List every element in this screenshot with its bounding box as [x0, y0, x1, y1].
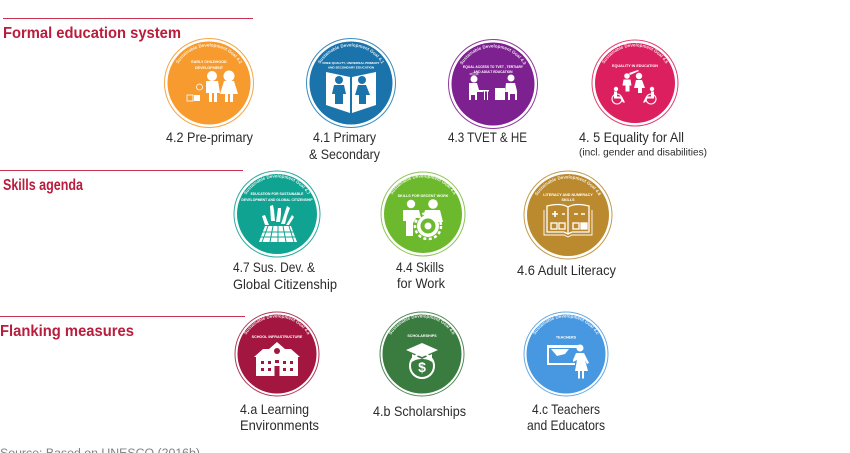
label: 4.7 Sus. Dev. & Global Citizenship: 4.7 Sus. Dev. & — [233, 259, 316, 275]
label: 4.c Teachers and Educators: 4.c Teachers — [532, 401, 600, 417]
badge: 4.5 equality in education — [592, 40, 678, 126]
heading: Formal education system: Formal education system — [3, 25, 181, 42]
badge: 4.b scholarships: SCHOLARSHIPS — [407, 334, 437, 338]
badge: 4.2 early childhood development: Sustainable Development Goal 4.2 — [176, 43, 242, 64]
label: 4.4 Skills for Work — [396, 259, 446, 291]
icon: open book with children — [326, 72, 376, 113]
badge: 4.2 early childhood development — [164, 38, 254, 128]
badge: 4.c teachers: Sustainable Development Goal 4.c — [533, 314, 598, 334]
label: 4.b Scholarships: 4.b Scholarships — [373, 403, 466, 419]
label: 4.4 Skills for Work: 4.4 Skills — [396, 259, 444, 275]
badge: 4.6 literacy and numeracy skills: SKILLS — [561, 198, 575, 202]
heading: Skills agenda: Skills agenda — [3, 177, 83, 194]
label: 4.5 Equality for All — [579, 129, 707, 158]
label: 4.3 TVET & HE: 4.3 TVET & HE — [448, 129, 527, 145]
badge: 4.7 sustainable development and global citizenship — [234, 170, 320, 258]
badge: 4.a school infrastructure: SCHOOL INFRASTRUCTURE — [252, 335, 303, 339]
icon: hands over globe — [258, 205, 298, 242]
badge: 4.6 literacy and numeracy skills: LITERACY AND NUMERACY — [543, 193, 593, 197]
label: 4.1 Primary & Secondary: 4.1 Primary — [313, 129, 376, 145]
badge: 4.b scholarships: Sustainable Development Goal 4.b — [388, 314, 454, 334]
icon: student and teacher at desks — [469, 73, 517, 100]
label: 4.1 Primary & Secondary — [309, 129, 380, 162]
badge: 4.b scholarships — [380, 312, 464, 396]
badge: 4.3 TVET and HE — [448, 39, 538, 129]
label: 4.7 Sus. Dev. & Global Citizenship — [233, 259, 337, 292]
icon: school building — [254, 342, 300, 376]
label: 4.1 Primary & Secondary: & Secondary — [309, 146, 380, 162]
label: 4.2 Pre-primary: 4.2 Pre-primary — [166, 129, 253, 145]
badge: 4.3 TVET and HE: AND ADULT EDUCATION — [473, 70, 513, 74]
badge: 4.3 TVET and HE: Sustainable Development Goal 4.3 — [460, 44, 526, 64]
badge: 4.5 equality in education: Sustainable Development Goal 4.5 — [602, 43, 668, 64]
label: 4.5 Equality for All: (incl. gender and disabilities) — [579, 146, 707, 158]
icon: children — [187, 70, 238, 102]
icon: children and wheelchairs — [612, 70, 656, 104]
badge: 4.4 skills for decent work: SKILLS FOR DECENT WORK — [398, 194, 449, 198]
badge: 4.1 primary and secondary: FREE QUALITY, UNIVERSAL PRIMARY — [323, 61, 380, 65]
badge: 4.2 early childhood development: DEVELOPMENT — [195, 66, 224, 70]
label: 4.4 Skills for Work: for Work — [397, 275, 446, 291]
label: 4.6 Adult Literacy: 4.6 Adult Literacy — [517, 262, 616, 278]
badge: 4.1 primary and secondary — [306, 38, 396, 128]
label: 4.5 Equality for All: 4. 5 Equality for All — [579, 129, 684, 145]
badge: 4.4 skills for decent work — [380, 172, 466, 256]
icon: two workers and gear — [403, 199, 443, 239]
badge: 4.a school infrastructure — [234, 312, 320, 396]
badge: 4.a school infrastructure: Sustainable Development Goal 4.a — [244, 314, 310, 335]
badge: 4.7 sustainable development and global citizenship: Sustainable Development Goal 4.7 — [244, 174, 310, 194]
badge: 4.1 primary and secondary: AND SECONDARY EDUCATION — [328, 66, 375, 70]
badge: 4.c teachers: TEACHERS — [556, 336, 577, 340]
badge: 4.3 TVET and HE: EQUAL ACCESS TO TVET , TERTIARY — [463, 65, 524, 69]
heading: Flanking measures: Flanking measures — [0, 323, 134, 340]
icon: graduation cap and coin: $ — [418, 359, 426, 375]
label: 4.c Teachers and Educators — [527, 401, 605, 433]
badge: 4.1 primary and secondary: Sustainable Development Goal 4.1 — [318, 43, 384, 64]
badge: 4.7 sustainable development and global citizenship: EDUCATION FOR SUSTAINABLE — [251, 192, 304, 196]
badge: 4.6 literacy and numeracy skills: Sustainable Development Goal 4.6 — [535, 175, 602, 196]
label: 4.7 Sus. Dev. & Global Citizenship: Global Citizenship — [233, 276, 337, 292]
label: 4.c Teachers and Educators: and Educators — [527, 417, 605, 433]
badge: 4.4 skills for decent work: Sustainable Development Goal 4.4 — [390, 175, 456, 194]
badge: 4.5 equality in education: EQUALITY IN EDUCATION — [612, 64, 658, 68]
label: 4.a Learning Environments: 4.a Learning — [240, 401, 309, 417]
badge: 4.6 literacy and numeracy skills — [524, 170, 612, 260]
label: 4.a Learning Environments: Environments — [240, 417, 319, 433]
label: 4.a Learning Environments — [240, 401, 319, 433]
badge: 4.c teachers — [524, 312, 608, 396]
icon: teacher at board — [547, 344, 589, 378]
badge: 4.2 early childhood development: EARLY CHILDHOOD — [191, 60, 227, 64]
badge: 4.7 sustainable development and global citizenship: DEVELOPMENT AND GLOBAL CITIZENSHIP — [241, 198, 313, 202]
icon: open book with symbols — [544, 205, 592, 237]
